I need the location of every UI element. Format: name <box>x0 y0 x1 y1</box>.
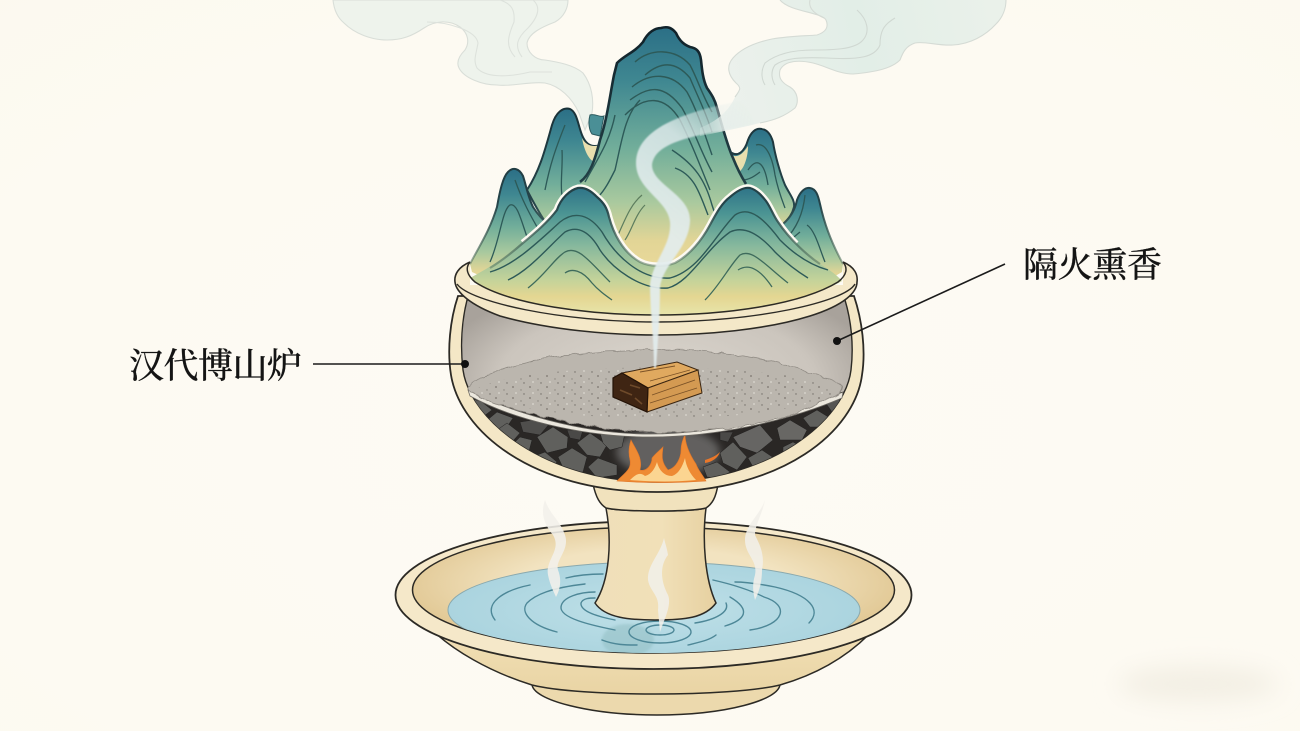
water ripples <box>491 574 814 645</box>
label: 汉代博山炉 <box>129 347 302 386</box>
dish interior <box>412 527 894 653</box>
sand / ash layer <box>468 350 843 437</box>
anchor dot <box>833 337 841 345</box>
mountain: central peak <box>580 27 765 270</box>
small rear crag <box>589 115 604 136</box>
fire <box>617 434 720 483</box>
steam wisps over the water <box>543 500 765 632</box>
water surface <box>448 562 860 658</box>
callout: 隔火熏香 <box>833 246 1162 345</box>
water dish <box>396 521 912 715</box>
mountain: back left <box>527 109 620 260</box>
leader line <box>837 264 1005 341</box>
dish body <box>430 628 875 694</box>
censer: mountain lid <box>455 27 857 335</box>
valley highlight <box>730 146 748 172</box>
mountain: far left <box>470 169 550 285</box>
censer: bowl wall and chamber <box>449 296 864 492</box>
mountain: front range <box>470 188 842 316</box>
mountain: back right <box>720 129 794 240</box>
metal plate under the ash <box>468 390 843 437</box>
mountain: far right <box>775 188 843 285</box>
smoke plume: upper left <box>333 0 593 130</box>
label: 隔火熏香 <box>1023 246 1162 285</box>
callout: 汉代博山炉 <box>129 347 469 386</box>
dish foot <box>532 684 780 715</box>
dish rim <box>396 521 912 669</box>
agarwood block <box>613 362 702 412</box>
anchor dot <box>461 360 469 368</box>
charcoal layer <box>474 392 844 479</box>
central smoke rising from the block <box>636 100 755 368</box>
lid rim <box>455 262 857 335</box>
censer: stem and collar <box>593 484 718 620</box>
valley highlight <box>582 138 602 163</box>
smoke plume: upper right <box>700 0 1006 136</box>
leader line <box>313 363 465 365</box>
